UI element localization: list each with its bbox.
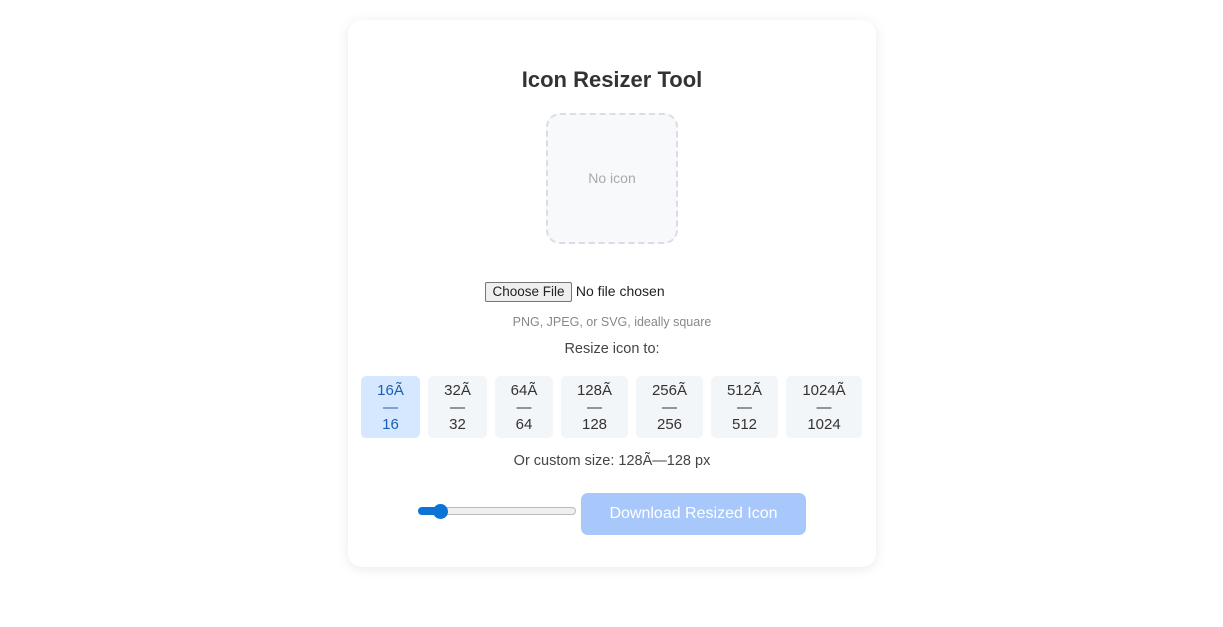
size options: 16 bbox=[382, 416, 399, 433]
icon preview placeholder: No icon bbox=[588, 170, 636, 186]
size options: 1024Ã bbox=[802, 382, 846, 399]
size options: — bbox=[450, 399, 465, 416]
size options: 64Ã bbox=[511, 382, 537, 399]
size options: 256 bbox=[657, 416, 682, 433]
size options: — bbox=[662, 399, 677, 416]
icon preview placeholder bbox=[546, 113, 678, 244]
size options: — bbox=[587, 399, 602, 416]
size options: 512 bbox=[732, 416, 757, 433]
file input: Choose File bbox=[492, 284, 565, 299]
size options: 1024 bbox=[807, 416, 841, 433]
resize label: Resize icon to: bbox=[564, 341, 660, 357]
card bbox=[348, 20, 876, 567]
size options: 512Ã bbox=[727, 382, 762, 399]
download button: Download Resized Icon bbox=[609, 505, 778, 522]
size options: 128 bbox=[582, 416, 607, 433]
title: Icon Resizer Tool bbox=[522, 67, 702, 92]
size options: 32 bbox=[449, 416, 466, 433]
size options: 128Ã bbox=[577, 382, 612, 399]
size options: — bbox=[383, 399, 398, 416]
hint text: PNG, JPEG, or SVG, ideally square bbox=[513, 315, 711, 329]
size options: — bbox=[737, 399, 752, 416]
custom size label: Or custom size: 128Ã—128 px bbox=[514, 453, 710, 469]
size options: 16Ã bbox=[377, 382, 404, 399]
size options: 32Ã bbox=[444, 382, 471, 399]
file input bbox=[485, 282, 665, 302]
size options: — bbox=[516, 399, 532, 416]
size options: 64 bbox=[516, 416, 532, 433]
slider bbox=[418, 504, 576, 519]
download button bbox=[581, 493, 806, 535]
size options: — bbox=[816, 399, 832, 416]
size options: 256Ã bbox=[652, 382, 687, 399]
file input: No file chosen bbox=[576, 283, 665, 299]
size options bbox=[361, 376, 862, 438]
